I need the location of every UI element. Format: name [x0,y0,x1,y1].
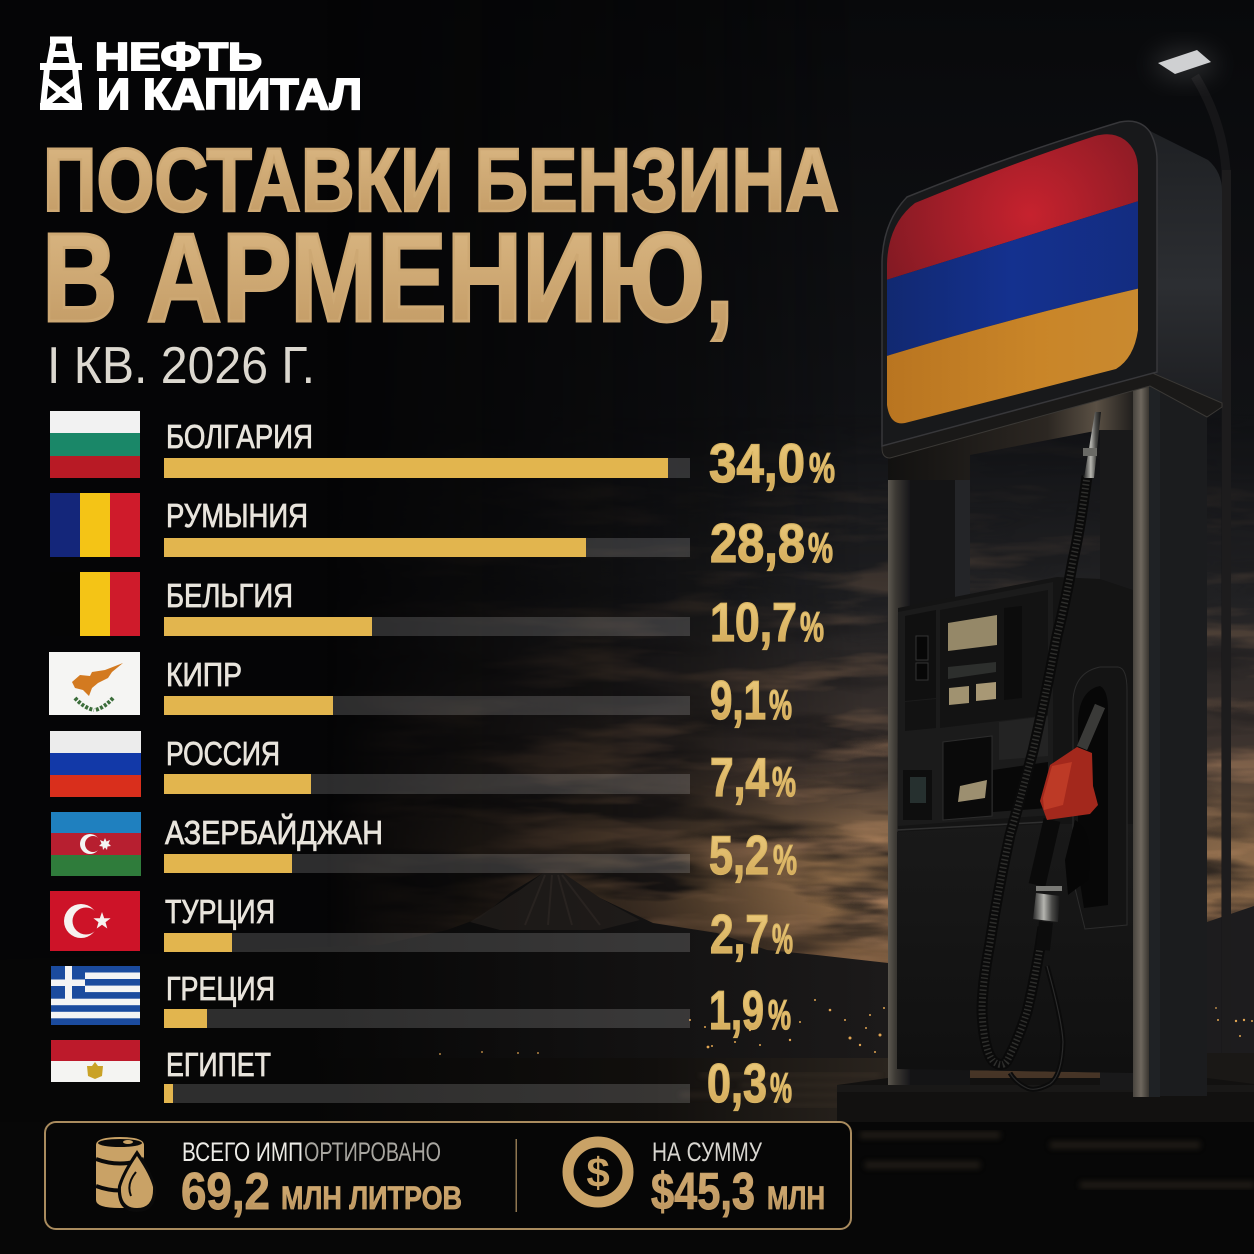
flag: Belgium [50,572,140,636]
label: БОЛГАРИЯ [166,418,313,455]
imported value: 69,2 [181,1163,270,1221]
flag stripe: blue [880,199,1145,358]
pump: right column [1100,375,1207,1097]
logo [40,36,362,119]
value: % [772,915,793,962]
row: Russia [50,731,796,808]
bar [164,617,690,636]
value: % [770,1064,792,1111]
nozzle: red grip [1040,747,1098,820]
row: Azerbaijan [51,812,797,886]
dispenser: buttons [916,636,928,680]
label: ГРЕЦИЯ [166,970,275,1007]
row: Bulgaria [50,411,835,494]
dispenser: small display left [949,686,969,705]
pump: dispenser body [897,577,1133,1073]
flag stripe: red [887,134,1138,280]
summary panel [45,1122,851,1229]
label: БЕЛЬГИЯ [166,577,293,614]
label: ТУРЦИЯ [165,893,275,930]
icon: oil barrel with drop [96,1137,156,1212]
row: Romania [50,493,833,574]
bar [164,538,690,557]
dispenser: side slot [1004,606,1022,700]
bar [164,696,690,715]
label: РУМЫНИЯ [166,497,308,534]
pump: canopy underside [888,385,1133,480]
pump: canopy lip [882,372,1222,458]
flag: Greece [51,966,140,1025]
background: wet ground reflection [0,1053,1254,1254]
imported label: ВСЕГО ИМП [182,1137,303,1167]
logo: derrick icon [40,40,82,107]
dispenser: main display [948,615,997,651]
title [42,131,839,348]
value: % [772,758,796,805]
value: 10,7 [710,591,797,653]
nozzle: lower hose [1043,922,1046,950]
amount value: $45,3 [651,1163,755,1221]
row: Greece [51,966,791,1041]
dispenser: main panel [940,590,1048,728]
value: 7,4 [710,746,769,808]
bar [164,933,690,952]
dispenser: small display right [976,682,996,701]
nozzle: ring [1036,886,1062,891]
flag: Romania [50,493,140,557]
title line 2: В АРМЕНИЮ, [42,207,734,348]
background: dark night sky [378,129,1254,1078]
lamp pole [1195,76,1231,1053]
bar [164,854,690,873]
flag: Bulgaria [50,411,140,478]
logo: wordmark line 2: И КАПИТАЛ [97,70,362,119]
row: Belgium [50,572,824,653]
label: ЕГИПЕТ [166,1046,271,1083]
value: 5,2 [709,824,769,886]
amount label: НА СУММУ [652,1137,763,1167]
fuel nozzle [1033,706,1100,950]
value: 9,1 [710,669,766,731]
value: 34,0 [709,432,805,494]
imported value: МЛН ЛИТРОВ [281,1180,462,1216]
bar [164,458,690,478]
divider [516,1139,517,1212]
bar [164,1009,690,1028]
imported label [182,1137,441,1167]
bar [164,1084,690,1103]
bar [164,774,690,794]
row: Turkey [50,891,793,965]
nozzle: handle [1037,820,1052,885]
flag stripe: orange [887,288,1138,424]
value: % [809,444,835,491]
flag: Azerbaijan [51,812,141,876]
amount value: МЛН [767,1180,825,1216]
panel frame [45,1122,851,1229]
flag: Egypt [51,1040,140,1082]
hose connector [1083,412,1101,478]
row: Cyprus [49,652,792,731]
logo: wordmark line 1: НЕФТЬ [95,36,262,79]
value: % [769,681,792,728]
value: % [773,836,797,883]
dispenser: dark slot [993,762,1048,812]
value: 0,3 [707,1052,767,1114]
dispenser: right panels [999,716,1048,760]
dispenser: lower left panel [905,699,936,731]
value: 28,8 [710,512,805,574]
nozzle: grip highlight [1043,762,1072,810]
background: city lights [439,999,1253,1055]
nozzle: trigger [1065,820,1090,895]
dispenser: keypad [903,770,932,820]
nozzle: chrome ferrule [1033,893,1060,922]
value: 2,7 [710,903,769,965]
label: КИПР [166,656,242,693]
flag: Russia [50,731,141,797]
dispenser: payment terminal [943,736,992,820]
background: volcano and distant ridge [0,873,1254,1070]
dispenser: left control panel [905,610,936,701]
value: % [800,603,824,650]
dispenser: secondary strip [948,662,996,679]
value: 1,9 [709,979,764,1041]
pump: nozzle holder [1073,667,1127,929]
imported value [181,1163,462,1221]
pump: sign side face [1140,124,1222,417]
value: % [768,991,791,1038]
icon: dollar coin: $ [586,1149,610,1196]
label: АЗЕРБАЙДЖАН [165,814,383,851]
label: РОССИЯ [166,735,280,772]
pump: left column [888,440,970,1085]
flag: Turkey [50,891,140,951]
pump: sign frame [882,121,1157,446]
row: Egypt [51,1040,792,1114]
icon: dollar coin [568,1142,628,1202]
platform base [837,1078,1254,1122]
imported label: ОРТИРОВАНО [304,1137,441,1167]
hose [982,476,1087,1089]
title line 1: ПОСТАВКИ БЕНЗИНА [43,131,839,231]
sign: Armenian flag [887,134,1138,424]
subtitle: I КВ. 2026 Г. [47,337,315,395]
value: % [808,524,833,571]
flag: Cyprus [49,652,140,715]
nozzle: spout [1082,706,1100,748]
lamp [1153,48,1217,80]
